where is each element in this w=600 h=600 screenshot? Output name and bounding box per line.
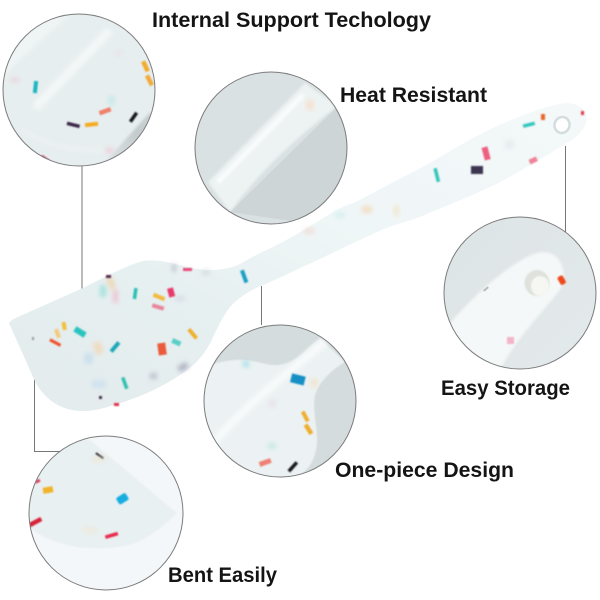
faint sprinkle [306, 100, 314, 110]
sprinkles [28, 452, 129, 539]
circle outline: bent easily [29, 436, 183, 590]
lower rim [20, 128, 105, 151]
label: one-piece design: One-piece Design [335, 458, 514, 482]
circle outline: heat resistant [195, 72, 347, 224]
hanging hole [524, 270, 550, 296]
circle outline: one-piece design [204, 325, 356, 477]
faint sprinkle [483, 286, 489, 292]
circle outline: easy storage [444, 217, 596, 369]
highlight band [35, 30, 110, 108]
connector line: internal support [81, 166, 83, 289]
connector line: easy storage [564, 146, 566, 232]
center highlight [218, 95, 303, 182]
label: easy storage: Easy Storage [441, 376, 570, 400]
sprinkles [259, 373, 313, 472]
spatula body [9, 103, 587, 411]
highlight ridge [212, 342, 325, 445]
handle hole [552, 115, 572, 135]
faint sprinkles [84, 140, 514, 388]
circle: internal support technology [4, 14, 154, 166]
faint sprinkles [83, 456, 106, 532]
label: bent easily: Bent Easily [168, 563, 277, 587]
faint sprinkles [10, 77, 116, 154]
faint sprinkles [243, 361, 317, 449]
title: internal support technology: Internal Support Techology [152, 8, 431, 32]
connector line: bent easily [34, 378, 62, 452]
label: heat resistant: Heat Resistant [340, 83, 487, 107]
upper left lighter area [0, 10, 75, 80]
pink sprinkle [507, 337, 514, 344]
spatula [9, 103, 587, 411]
circle outline: internal support technology [3, 14, 155, 166]
circle: easy storage [444, 218, 596, 368]
spatula close-up [200, 338, 345, 482]
connector line: one-piece design [260, 286, 262, 325]
circle: one-piece design [204, 326, 356, 476]
white band [208, 83, 337, 212]
circle: heat resistant [196, 72, 346, 224]
bent blade [30, 440, 176, 548]
sharp sprinkles [32, 111, 584, 406]
shaded spatula edge [109, 113, 150, 159]
red sprinkle [557, 275, 567, 286]
sprinkles [33, 60, 154, 163]
circle: bent easily [30, 436, 182, 590]
handle close-up [450, 252, 564, 366]
hole highlight [531, 276, 549, 296]
lower shade [231, 109, 346, 221]
